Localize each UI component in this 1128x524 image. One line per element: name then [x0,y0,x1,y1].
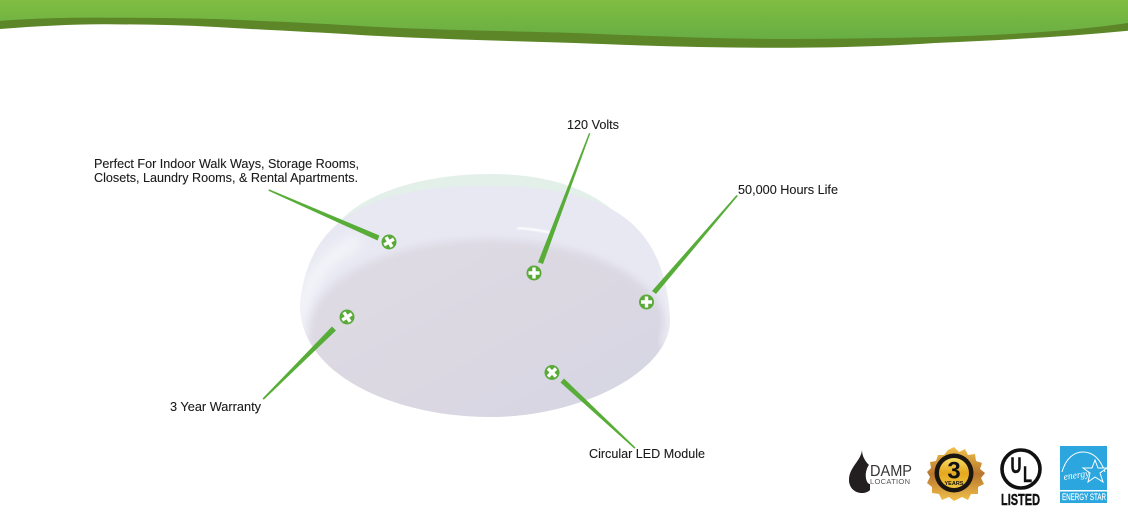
leader line [262,326,336,400]
UL ring [1002,450,1040,488]
soft left edge [300,242,353,330]
highlight [517,228,552,233]
listed text: LISTED [1001,492,1040,509]
badge label: ENERGY STAR [1062,492,1106,502]
icon: UL listed: L [1023,462,1032,487]
callout: 3 Year Warranty [170,310,354,414]
badge star [1083,460,1107,482]
icon: damp location [849,450,912,493]
marker [544,365,560,380]
label text: 120 Volts [567,118,619,132]
badge background [1060,446,1107,503]
damp text: DAMP [870,463,912,480]
marker [526,266,542,280]
leader line [268,189,380,240]
soft right edge [661,318,670,344]
water drop [849,450,870,493]
light lens face [306,239,670,431]
seal centre [939,458,969,488]
seal text: 3 [947,458,961,484]
callout: use locations [94,157,396,250]
light base rim [333,174,630,230]
UL letters: U [1010,453,1022,478]
leader line [560,378,636,449]
header shadow wave [0,0,1128,48]
icon: damp location: LOCATION [870,477,910,486]
label text: Circular LED Module [589,447,705,461]
label text: 50,000 Hours Life [738,183,838,197]
label text: 3 Year Warranty [170,400,262,414]
leader line [652,195,738,294]
green header banner [0,0,1128,48]
badge divider [1060,490,1107,492]
icon: 3 year warranty seal: YEARS [945,481,964,487]
header main wave [0,0,1128,39]
callout: Circular LED Module [544,365,705,461]
icon: 3 year warranty seal [927,447,985,501]
label text: Perfect For Indoor Walk Ways, Storage Rooms, [94,157,359,171]
seal ring [934,454,974,492]
marker [639,294,654,310]
marker [382,234,396,250]
callout: use locations: Closets, Laundry Rooms, & Rental Apartments. [94,171,358,185]
seal burst [927,447,985,501]
ceiling light fixture [295,174,675,431]
icon: energy star [1060,446,1107,503]
light body [300,186,670,417]
callout: 120 Volts [526,118,619,280]
callout: 50,000 Hours Life [639,183,838,310]
badge arc [1062,452,1105,472]
marker [340,310,354,324]
icon: UL listed [1001,450,1040,509]
leader line [538,133,590,264]
badge script: energy [1063,468,1091,483]
